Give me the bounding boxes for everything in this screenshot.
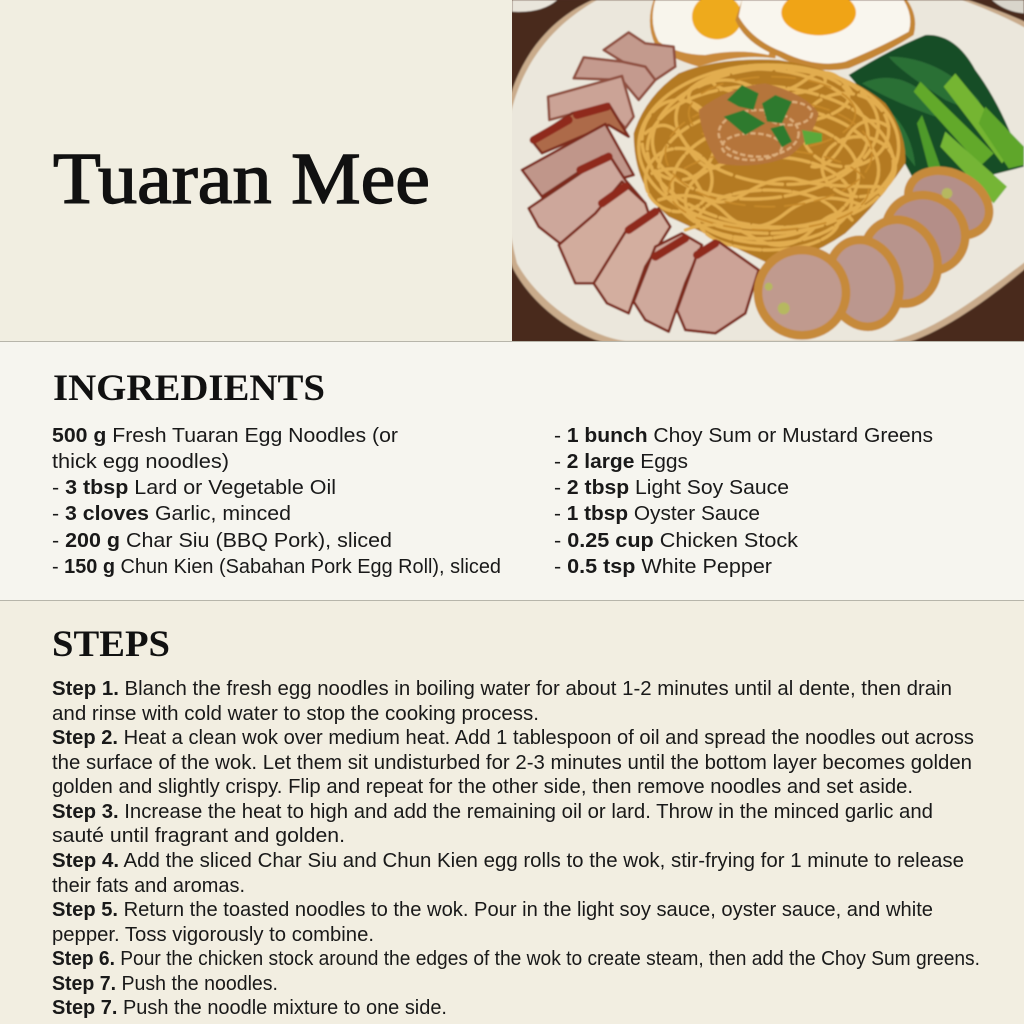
ingredients list left column: thick egg noodles) — [52, 450, 229, 473]
ingredients list right column: - 2 large Eggs — [554, 450, 688, 473]
ingredients list right column: - 0.5 tsp White Pepper — [554, 555, 772, 578]
ingredients list left column: - 200 g Char Siu (BBQ Pork), sliced — [52, 529, 392, 552]
char siu pork slices — [522, 32, 759, 333]
steps text: and rinse with cold water to stop the cooking process. — [52, 702, 539, 725]
steps text — [52, 677, 980, 1019]
steps text: Step 7. Push the noodles. — [52, 972, 278, 995]
ingredients list left column — [52, 424, 501, 578]
steps text: Step 7. Push the noodle mixture to one side. — [52, 996, 447, 1019]
steps text: Step 1. Blanch the fresh egg noodles in boiling water for about 1-2 minutes until al dente, then drain — [52, 677, 952, 700]
panel: steps — [0, 601, 1024, 1024]
steps text: pepper. Toss vigorously to combine. — [52, 923, 374, 946]
ingredients heading: INGREDIENTS — [53, 368, 325, 409]
steps text: Step 3. Increase the heat to high and add the remaining oil or lard. Throw in the minced garlic and — [52, 800, 933, 823]
ingredients list left column: - 3 tbsp Lard or Vegetable Oil — [52, 476, 336, 499]
steps heading: STEPS — [52, 624, 170, 665]
ingredients list right column: - 1 tbsp Oyster Sauce — [554, 502, 760, 525]
ingredients list right column: - 2 tbsp Light Soy Sauce — [554, 476, 789, 499]
title: Tuaran Mee — [53, 138, 430, 219]
steps text: their fats and aromas. — [52, 874, 245, 897]
steps text: sauté until fragrant and golden. — [52, 824, 345, 847]
wooden table — [512, 0, 1024, 341]
steps text: golden and slightly crispy. Flip and repeat for the other side, then remove noodles and set aside. — [52, 775, 913, 798]
steps text: the surface of the wok. Let them sit undisturbed for 2-3 minutes until the bottom layer becomes golden — [52, 751, 972, 774]
char siu glaze — [534, 107, 715, 257]
noodles — [634, 57, 905, 265]
plate — [500, 0, 1024, 347]
steps text: Step 6. Pour the chicken stock around the edges of the wok to create steam, then add the Choy Sum greens. — [52, 947, 980, 970]
fried shallots topping — [699, 83, 819, 166]
ingredients list left column: - 150 g Chun Kien (Sabahan Pork Egg Roll), sliced — [52, 555, 501, 578]
panel: ingredients — [0, 341, 1024, 601]
greens — [849, 35, 1024, 203]
ingredients list right column: - 1 bunch Choy Sum or Mustard Greens — [554, 424, 933, 447]
fried eggs — [650, 0, 915, 70]
panel: title block — [0, 0, 512, 341]
chun kien egg roll slices — [758, 158, 1000, 335]
steps text: Step 2. Heat a clean wok over medium heat. Add 1 tablespoon of oil and spread the noodles out across — [52, 726, 974, 749]
ingredients list right column — [554, 424, 933, 578]
ingredients list left column: 500 g Fresh Tuaran Egg Noodles (or — [52, 424, 398, 447]
steps text: Step 5. Return the toasted noodles to the wok. Pour in the light soy sauce, oyster sauce, and white — [52, 898, 933, 921]
steps text: Step 4. Add the sliced Char Siu and Chun Kien egg rolls to the wok, stir-frying for 1 minute to release — [52, 849, 964, 872]
cilantro garnish — [724, 85, 822, 147]
food photo illustration — [512, 0, 1024, 341]
ingredients list right column: - 0.25 cup Chicken Stock — [554, 529, 799, 552]
ingredients list left column: - 3 cloves Garlic, minced — [52, 502, 291, 525]
egg roll filling flecks — [765, 188, 952, 314]
